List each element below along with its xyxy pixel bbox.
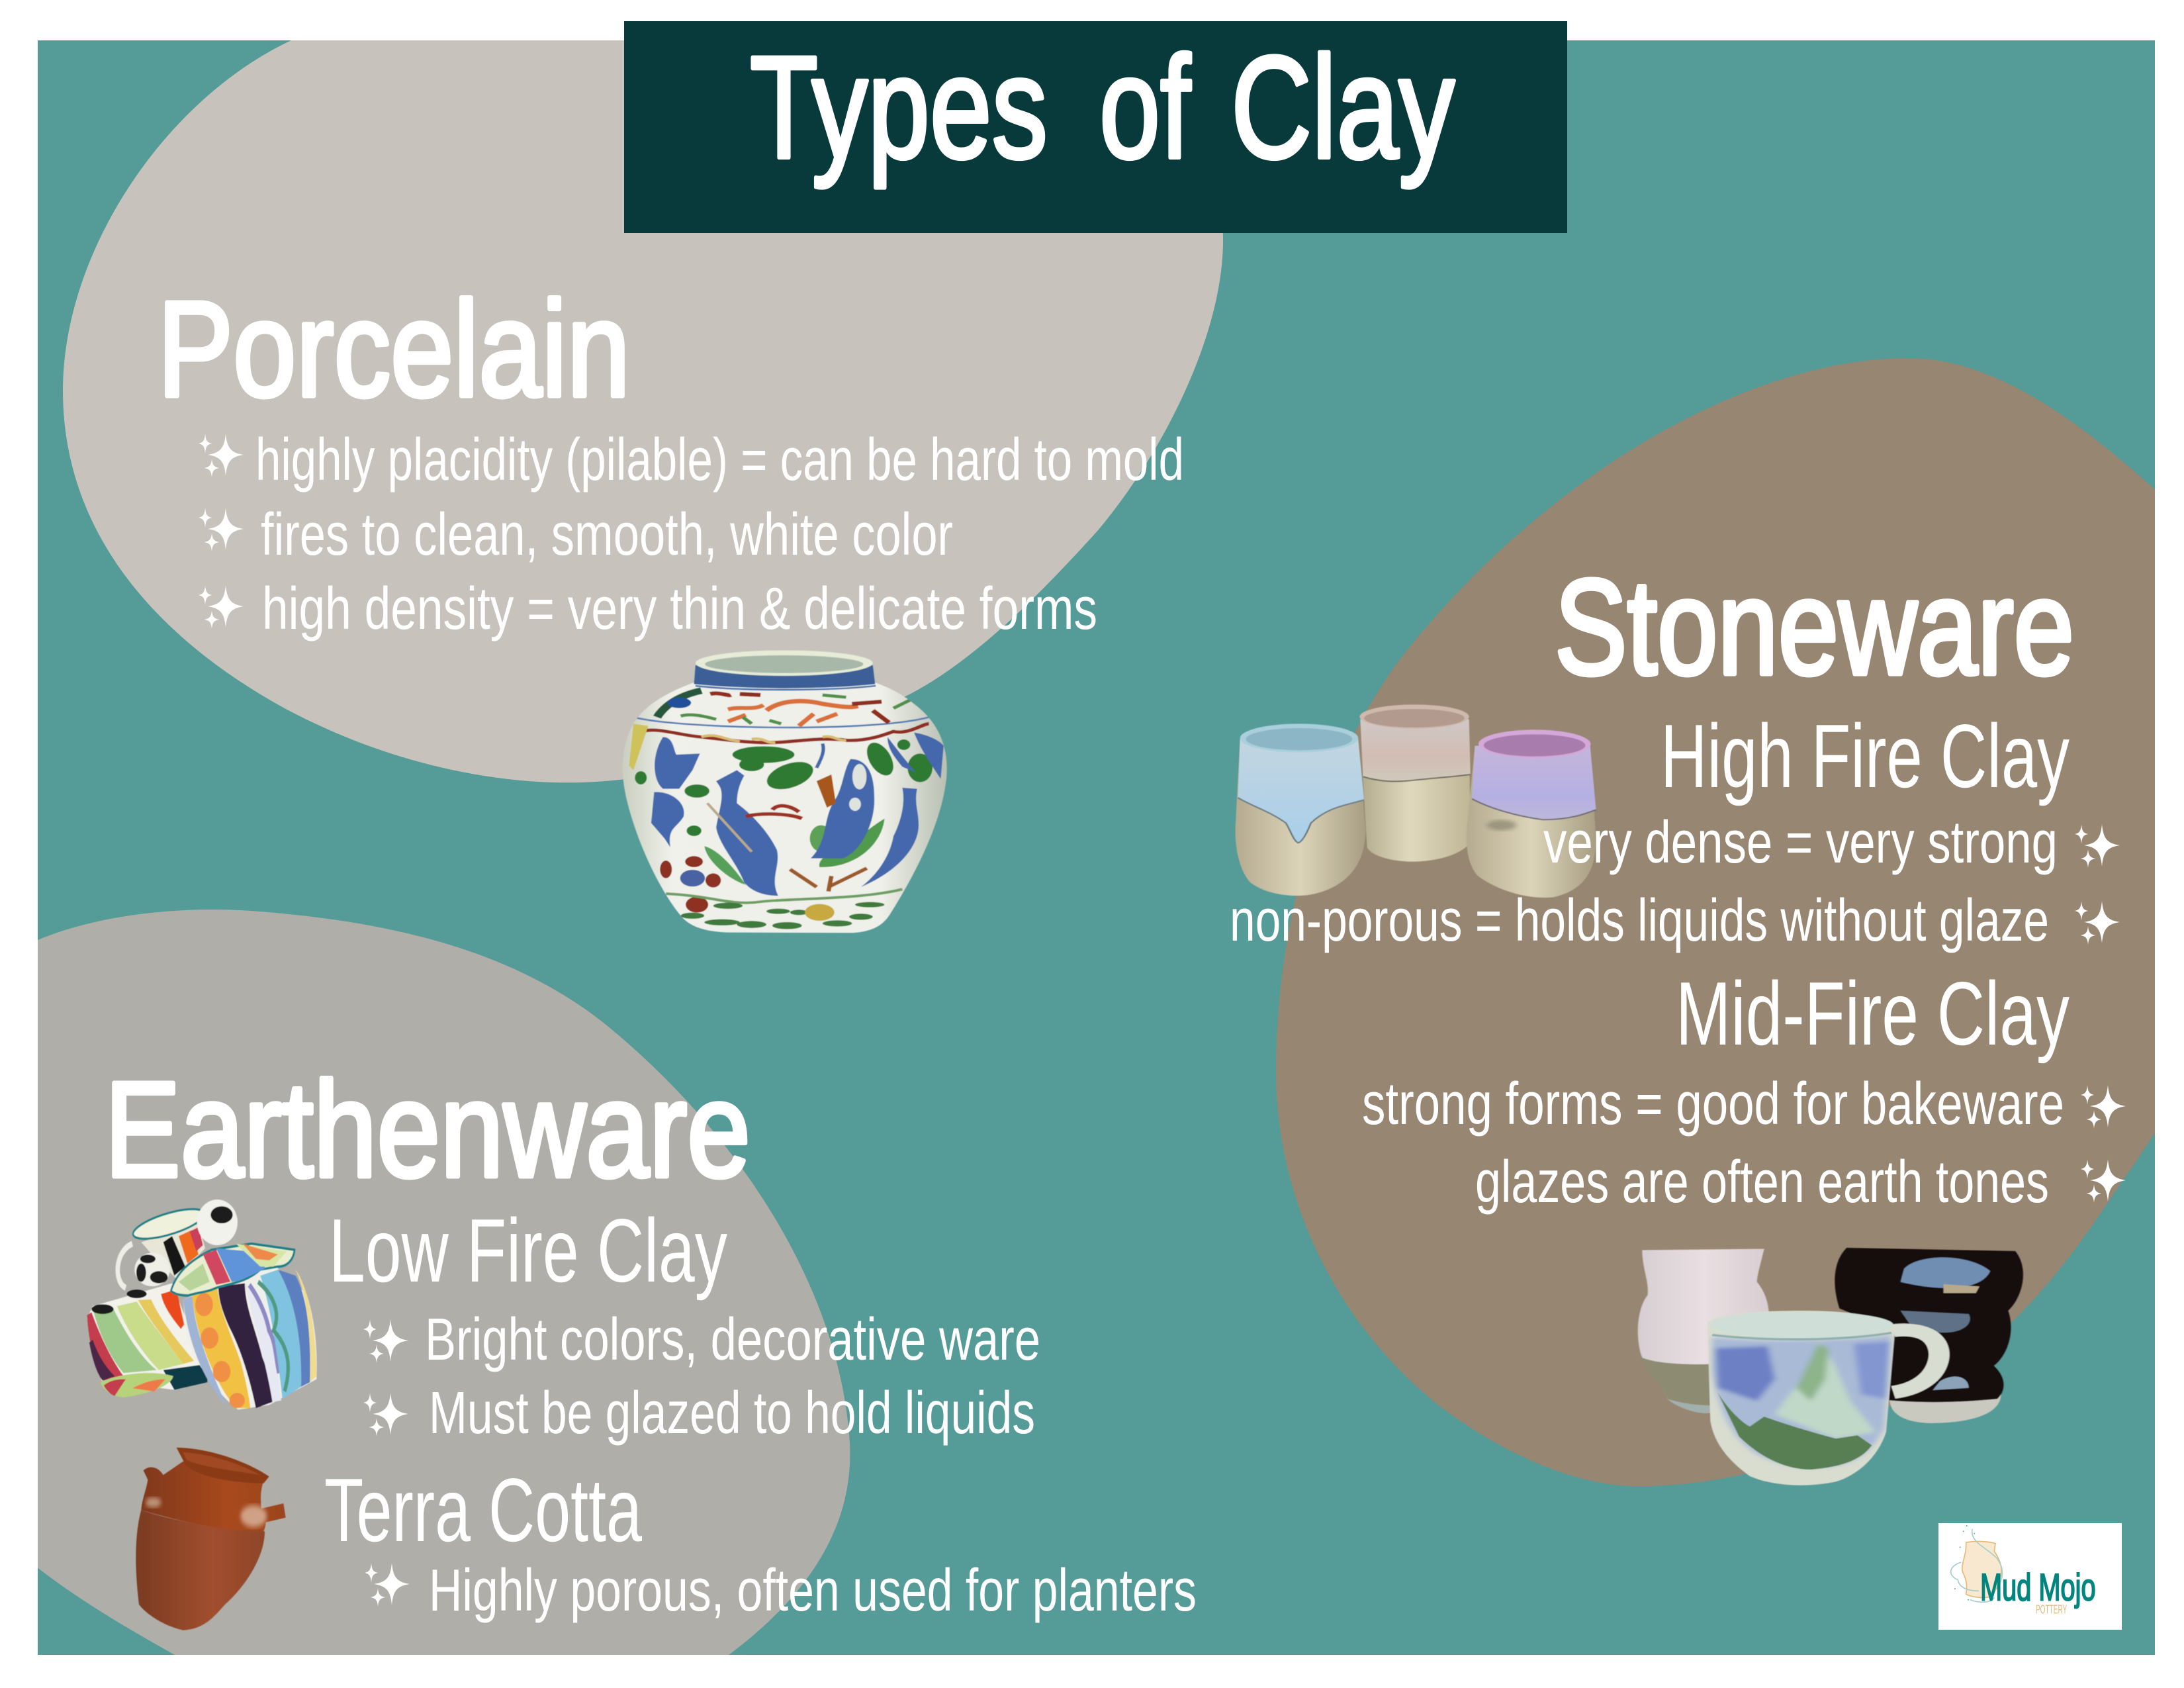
lid knob [197,1199,238,1245]
title banner: of [1099,26,1191,189]
black mug [1835,1248,2023,1423]
panel: stoneware blob [1276,358,2177,1486]
middle tumbler [1359,704,1471,862]
title banner: Types [750,26,1048,189]
panel: earthenware blob [26,910,850,1668]
glazed mug [1707,1311,1895,1485]
heading: earthenware: Earthenware [105,1054,751,1205]
illustration: three stoneware mugs [1638,1248,2023,1485]
striped cup [118,1203,206,1288]
blue tumbler [1236,724,1365,896]
title banner [624,21,1567,233]
earthenware: low fire clay text: Must be glazed to hold liquids [429,1380,1035,1446]
striped jar [183,1266,317,1409]
logo: Mud Mojo Pottery: POTTERY [2036,1602,2068,1616]
ruffled lid [171,1244,295,1295]
illustration: porcelain jar [623,650,947,933]
lilac tumbler [1467,729,1596,898]
mug handle [1893,1330,1939,1392]
seated figure upper left [655,737,700,789]
heading: terra cotta with bullet: Highly porous, often used for planters [429,1558,1197,1624]
porcelain bullet list [199,427,1184,642]
icon: jar with swirl [1951,1525,2002,1602]
illustration: colorful low fire pots [87,1199,317,1409]
stoneware: high fire clay text [1230,706,2120,954]
title banner: Clay [1231,26,1455,189]
heading: terra cotta with bullet [324,1460,1197,1624]
robed figure with staff [716,770,778,896]
heading: terra cotta with bullet: Terra Cotta [324,1460,642,1560]
earthenware: low fire clay text: Low Fire Clay [329,1200,727,1301]
logo: Mud Mojo Pottery [1938,1523,2122,1630]
heading: stoneware: Stoneware [1555,551,2074,703]
porcelain bullet list: high density = very thin & delicate forms [262,576,1097,642]
heading: porcelain: Porcelain [158,273,630,425]
porcelain bullet list: fires to clean, smooth, white color [261,502,953,568]
earthenware: low fire clay text: Bright colors, decorative ware [425,1307,1040,1373]
earthenware: low fire clay text [329,1200,1040,1446]
logo: Mud Mojo Pottery: Mud Mojo [1980,1566,2096,1609]
illustration: terracotta pot [136,1448,286,1630]
panel: porcelain blob [63,40,1223,782]
white vase [1638,1249,1769,1413]
stoneware: mid-fire clay text [1362,963,2126,1215]
tipped jar [87,1284,207,1397]
stoneware: high fire clay text: very dense = very strong [1543,810,2058,876]
porcelain bullet list: highly placidity (pilable) = can be hard to mold [255,427,1184,493]
bearded figure [811,759,874,859]
illustration: three glazed tumblers [1236,704,1596,898]
